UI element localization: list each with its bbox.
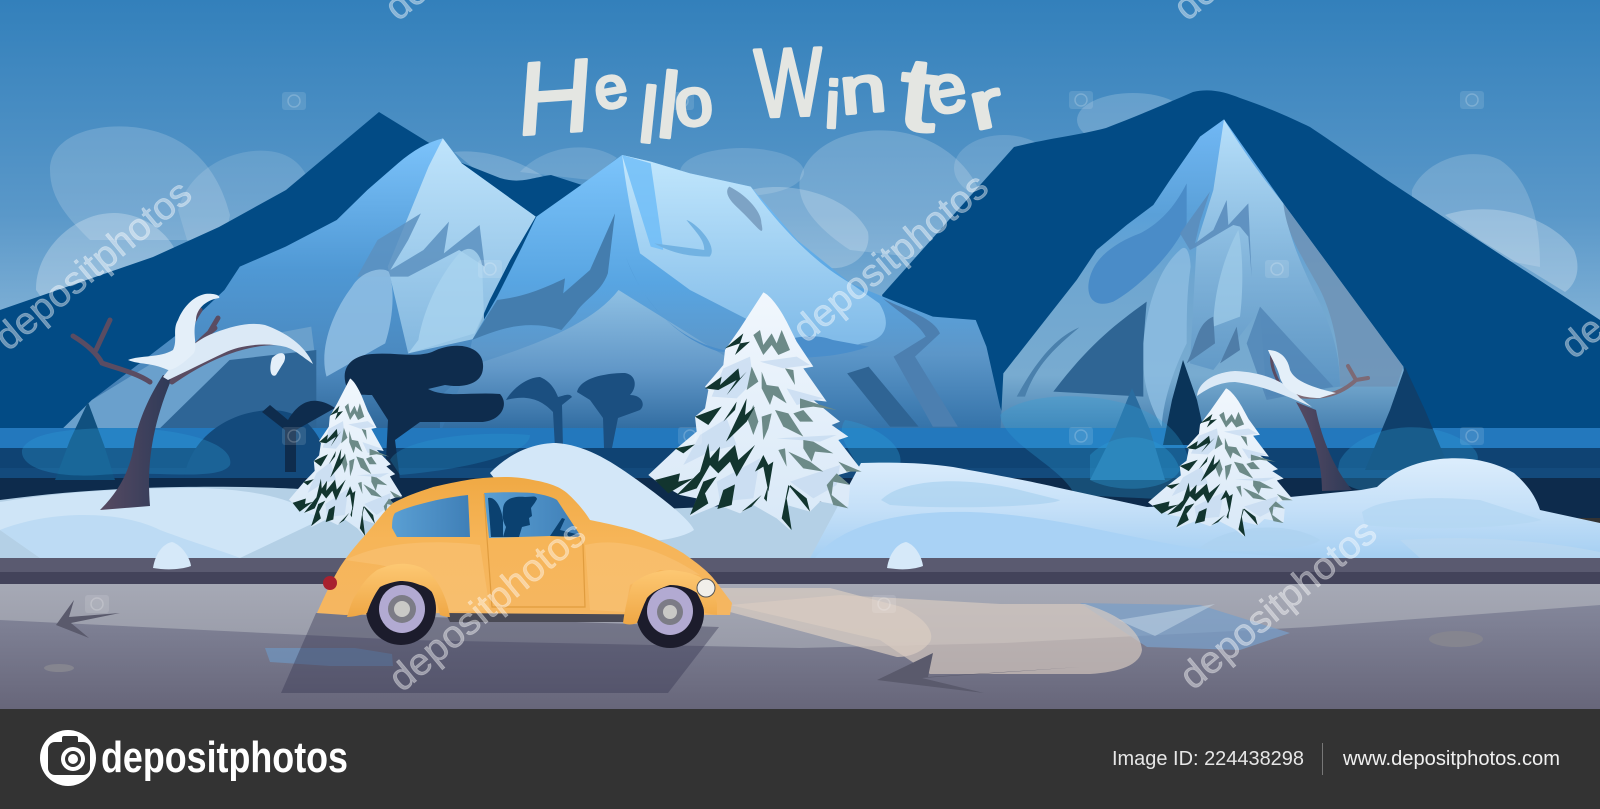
road cracks xyxy=(56,600,1080,693)
title: Hello Winter: l xyxy=(653,54,684,158)
title: Hello Winter: o xyxy=(671,62,716,142)
title: Hello Winter: e xyxy=(921,48,972,130)
clouds xyxy=(36,93,1577,310)
rear window xyxy=(392,495,470,537)
lower slope xyxy=(440,290,811,433)
light face xyxy=(1190,119,1340,397)
website url: www.depositphotos.com xyxy=(1342,747,1560,770)
puddles xyxy=(265,603,1290,666)
mountain center xyxy=(440,155,1011,440)
car xyxy=(317,477,732,648)
shadow xyxy=(472,213,615,340)
tail light xyxy=(323,576,337,590)
title: Hello Winter: r xyxy=(963,66,1009,144)
watermark text: depositphotos xyxy=(381,513,594,700)
road surface xyxy=(0,584,1600,709)
light face xyxy=(622,155,886,348)
silhouette hill xyxy=(184,410,332,478)
snow ground xyxy=(0,443,1600,558)
snow on branches xyxy=(163,324,313,380)
logo icon xyxy=(40,730,96,786)
snow dome center xyxy=(490,443,694,542)
title: Hello Winter: i xyxy=(823,67,842,142)
silhouette trees far xyxy=(506,373,643,448)
back mountain left xyxy=(0,112,582,440)
footer bar xyxy=(0,709,1600,809)
title: Hello Winter: H xyxy=(514,37,596,157)
wheel rear xyxy=(366,573,436,645)
fender front xyxy=(623,570,717,624)
sky background xyxy=(0,0,1600,430)
body xyxy=(317,477,732,615)
shadow zigzags xyxy=(357,213,485,277)
image id: Image ID: 224438298 xyxy=(1112,747,1304,770)
road stones xyxy=(44,631,1483,672)
fender rear xyxy=(347,564,450,617)
title: Hello Winter: n xyxy=(837,50,889,128)
title: Hello Winter: e xyxy=(589,53,632,123)
watermark text: depositphotos xyxy=(785,165,996,351)
title: Hello Winter: t xyxy=(894,35,943,154)
snow mounds on roadside xyxy=(153,542,923,569)
snow on right branches xyxy=(1197,371,1312,407)
logo text: depositphotos xyxy=(101,733,348,782)
title: Hello Winter: W xyxy=(753,28,825,139)
car shadow xyxy=(281,613,719,693)
lake bands xyxy=(0,428,1600,518)
wheel front xyxy=(636,578,704,648)
driver silhouette xyxy=(488,496,580,537)
headlight xyxy=(697,579,715,597)
front window xyxy=(484,492,580,538)
mountain right front xyxy=(1000,119,1413,440)
headlight beam xyxy=(720,588,1142,674)
silhouette trees xyxy=(262,346,504,480)
bare tree right xyxy=(1197,350,1368,491)
pine tree large xyxy=(648,292,862,530)
body highlight xyxy=(345,542,700,612)
title: Hello Winter: l xyxy=(635,70,662,160)
watermark text: depositphotos xyxy=(1172,511,1385,698)
footer divider xyxy=(1322,743,1323,775)
camera watermark icons xyxy=(85,91,1484,613)
road curb xyxy=(0,558,1600,584)
mountain left front xyxy=(51,138,536,440)
distant small pines xyxy=(55,360,1450,480)
pine tree right xyxy=(1148,388,1293,537)
title: Hello Winter xyxy=(514,28,1009,160)
under body xyxy=(445,612,625,622)
pine tree left xyxy=(289,378,402,536)
door lines xyxy=(484,494,585,607)
bare tree left xyxy=(73,294,313,510)
right snowfield xyxy=(810,458,1600,558)
snow cap light face xyxy=(388,138,536,353)
back mountain right xyxy=(882,90,1600,440)
lobes xyxy=(324,270,393,377)
fog swirls xyxy=(22,396,1478,500)
